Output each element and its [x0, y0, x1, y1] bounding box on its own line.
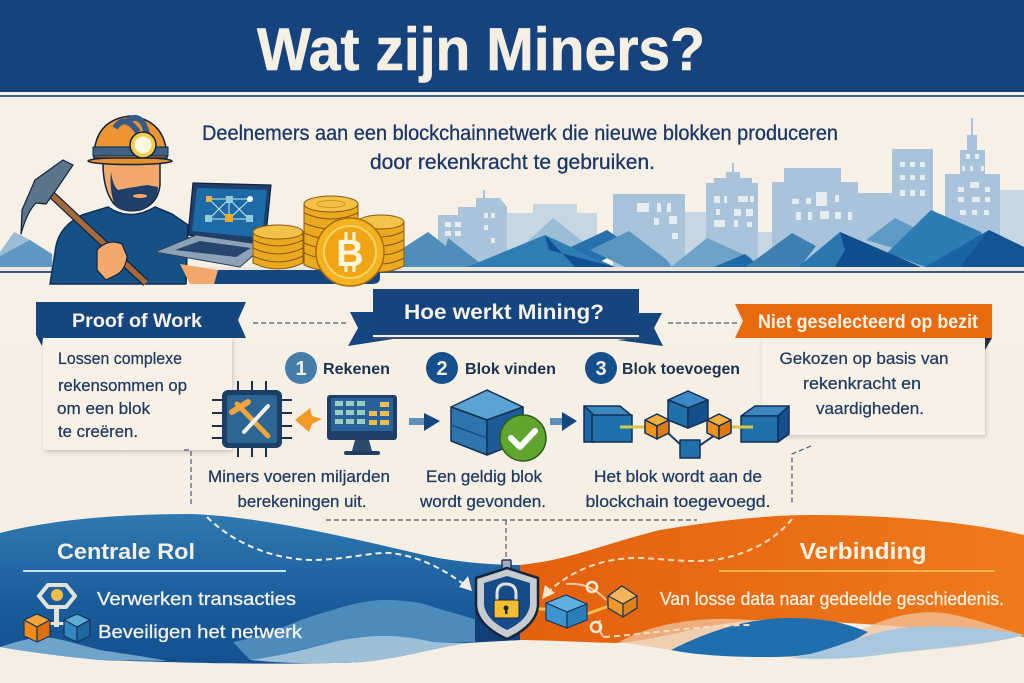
- pickaxe: [52, 195, 146, 283]
- card: Niet geselecteerd op bezit: Gekozen op basis van: [780, 349, 948, 368]
- bottom panel: orange wave: [520, 515, 1024, 659]
- list: central role: Beveiligen het netwerk: [98, 622, 303, 642]
- heading: Verbinding: Verbinding: [800, 538, 926, 564]
- card: Proof of Work: om een blok: [57, 399, 150, 418]
- icon: shield with padlock: [476, 560, 538, 639]
- icon: gold coins: [253, 196, 404, 286]
- step 1 description: [208, 467, 390, 511]
- shirt: [50, 207, 188, 284]
- network on screen: [209, 199, 250, 219]
- step 3 heading: Blok toevoegen: [622, 361, 740, 378]
- dashed arrows: [207, 517, 792, 637]
- icon: mining chip: [212, 381, 292, 457]
- card: Proof of Work: [36, 302, 246, 450]
- icon: valid block with check: [451, 390, 546, 461]
- wave layer: mid blue: [233, 600, 477, 660]
- skyline windows: [445, 154, 990, 243]
- card: Proof of Work: te creëren.: [58, 422, 138, 441]
- card: Proof of Work: Lossen complexe: [58, 349, 182, 368]
- icon: monitor: [327, 395, 397, 455]
- dark base strip: [190, 270, 380, 284]
- step 3 description: blockchain toegevoegd.: [586, 492, 770, 511]
- arrow: step 1 to 2: [409, 413, 440, 431]
- bitcoin: [316, 218, 384, 286]
- step 2 description: [419, 467, 546, 511]
- illustration: miner with pickaxe: [21, 116, 380, 284]
- hand under laptop: [180, 264, 218, 284]
- step 2 heading: [426, 352, 556, 384]
- wave layer: pale blue right: [250, 636, 467, 663]
- helmet: [88, 158, 172, 164]
- left stack: [253, 232, 303, 269]
- card: Niet geselecteerd op bezit: Niet geselecteerd op bezit: [758, 312, 979, 333]
- icon: gold coins: B: [336, 233, 364, 275]
- card: Niet geselecteerd op bezit: rekenkracht en: [803, 374, 921, 393]
- step 1 heading: [285, 352, 390, 384]
- heading banner: Hoe werkt Mining: Hoe werkt Mining?: [404, 300, 604, 324]
- right stack: [358, 222, 404, 272]
- step 1 heading: Rekenen: [323, 361, 390, 378]
- list: central role: [97, 589, 303, 642]
- arrow: orange: [295, 408, 322, 432]
- section divider: [0, 267, 1024, 273]
- heading banner: Hoe werkt Mining: [348, 289, 663, 346]
- shield backdrop: [475, 590, 520, 642]
- header band: [0, 0, 1024, 97]
- step 1 description: Miners voeren miljarden: [208, 467, 390, 486]
- connector dashes: [184, 323, 811, 560]
- mouth patch: [133, 194, 147, 198]
- mountains: [0, 210, 1024, 267]
- skyline: [438, 118, 1024, 267]
- intro text: Deelnemers aan een blockchainnetwerk die nieuwe blokken produceren: [202, 122, 838, 145]
- icon: node with cubes: [24, 585, 90, 642]
- intro text: door rekenkracht te gebruiken.: [370, 151, 655, 174]
- bottom panel: blue wave: [0, 514, 520, 664]
- face: [103, 163, 160, 211]
- heading: Centrale Rol: Centrale Rol: [57, 539, 195, 564]
- step 2 description: wordt gevonden.: [419, 492, 546, 511]
- card: Niet geselecteerd op bezit: vaardigheden.: [816, 399, 924, 418]
- intro text: [202, 122, 838, 174]
- step 1 heading: 1: [295, 358, 307, 380]
- step 2 description: Een geldig blok: [426, 467, 542, 486]
- card: Proof of Work: rekensommen op: [58, 376, 187, 395]
- hand: [97, 242, 127, 280]
- beard: [110, 172, 158, 211]
- text: Verbinding description: Van losse data naar gedeelde geschiedenis.: [660, 589, 1004, 609]
- arrow: step 2 to 3: [550, 412, 577, 431]
- icon: chain of blocks: [584, 391, 789, 458]
- wave layer: pale blue left: [0, 637, 167, 661]
- arrowheads: [459, 576, 555, 599]
- title: Wat zijn Miners?: [257, 16, 705, 83]
- step 3 description: [586, 467, 770, 511]
- icon: connected cubes: [535, 582, 637, 637]
- step 2 heading: Blok vinden: [465, 361, 556, 378]
- step 2 heading: 2: [436, 358, 448, 380]
- card: Proof of Work: Proof of Work: [72, 311, 202, 332]
- step 1 description: berekeningen uit.: [238, 492, 366, 511]
- list: central role: Verwerken transacties: [97, 589, 296, 609]
- step 3 heading: 3: [595, 358, 607, 380]
- step 3 description: Het blok wordt aan de: [594, 467, 762, 486]
- middle stack: [304, 204, 358, 271]
- card: Niet geselecteerd op bezit: [735, 304, 992, 435]
- step 3 heading: [585, 352, 740, 384]
- laptop: [188, 183, 271, 245]
